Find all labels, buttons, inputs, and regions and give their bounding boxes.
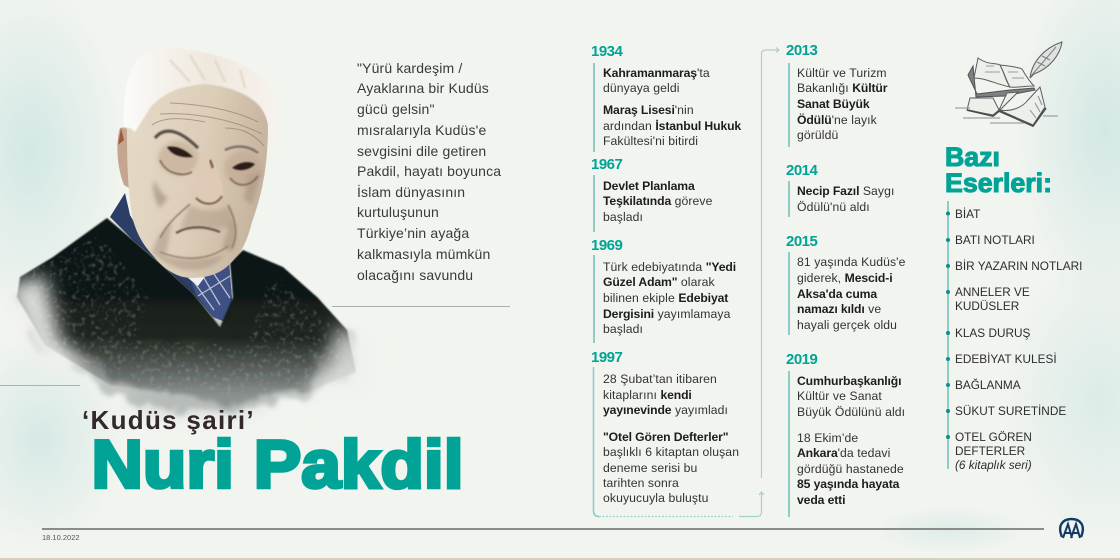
- entry 1967: Devlet Planlama: [603, 179, 695, 193]
- entry 1934: Fakültesi'ni bitirdi: [603, 134, 698, 148]
- shirt: [110, 193, 232, 323]
- entry 1934: Maraş Lisesi'nin: [603, 103, 694, 117]
- smoke fade: edges: [5, 275, 372, 412]
- entry 2019: [788, 371, 905, 517]
- year 2013: 2013: [786, 42, 817, 59]
- sweater wear: [25, 235, 350, 395]
- entry 2015: namazı kıldı ve: [797, 302, 881, 316]
- entry 2014: Necip Fazıl Saygı: [797, 184, 894, 198]
- decorative rule: teal left: [0, 385, 80, 386]
- text: DEFTERLER: [955, 444, 1025, 458]
- date: 18.10.2022: [42, 533, 80, 542]
- text: BİR YAZARIN NOTLARI: [955, 259, 1082, 273]
- eye sockets: [158, 141, 198, 175]
- year 1967: 1967: [591, 156, 622, 173]
- timeline column 2: [786, 42, 905, 517]
- eyebrows: [155, 131, 198, 148]
- text: EDEBİYAT KULESİ: [955, 352, 1057, 366]
- eyes: [167, 147, 193, 157]
- entry 2013: görüldü: [797, 128, 838, 142]
- entry 1934: Kahramanmaraş'ta: [603, 66, 710, 80]
- entry 2015: giderek, Mescid-i: [797, 271, 892, 285]
- text: SÜKUT SURETİNDE: [955, 404, 1066, 418]
- entry 2013: Ödülü'ne layık: [797, 113, 877, 127]
- heading: works: Bazı: [945, 142, 1000, 172]
- entry 2013: [788, 63, 888, 147]
- year 1969: 1969: [591, 237, 622, 254]
- entry 1997: okuyucuyla buluştu: [603, 491, 708, 505]
- quote text: sevgisini dile getiren: [357, 143, 486, 159]
- entry 2019: 85 yaşında hayata: [797, 477, 899, 491]
- quote text: Türkiye’nin ayağa: [357, 225, 469, 241]
- entry 1997: tarihten sonra: [603, 476, 679, 490]
- text: OTEL GÖREN: [955, 430, 1032, 444]
- entry 1997: [603, 372, 739, 505]
- quote text: olacağını savundu: [357, 267, 473, 283]
- quote text: kurtuluşunun: [357, 204, 439, 220]
- quote text: Pakdil, hayatı boyunca: [357, 163, 501, 179]
- year 1934: 1934: [591, 43, 622, 60]
- works list text: [955, 207, 1082, 472]
- entry 1997: başlıklı 6 kitaptan oluşan: [603, 445, 739, 459]
- entry 1997: kitaplarını kendi: [603, 388, 692, 402]
- quote text: kalkmasıyla mümkün: [357, 246, 490, 262]
- entry 2015: [788, 252, 905, 335]
- entry 1969: Güzel Adam" olarak: [603, 275, 715, 289]
- text: (6 kitaplık seri): [955, 458, 1032, 472]
- entry 1967: [593, 175, 712, 232]
- text: ANNELER VE: [955, 285, 1030, 299]
- entry 1934: [593, 63, 742, 152]
- entry 1934: dünyaya geldi: [603, 81, 680, 95]
- entry 1967: başladı: [603, 210, 643, 224]
- entry 2019: veda etti: [797, 493, 845, 507]
- list dots: [946, 212, 950, 439]
- subtitle: ‘Kudüs şairi’: [82, 405, 255, 435]
- entry 2013: Bakanlığı Kültür: [797, 81, 887, 95]
- face: [127, 78, 268, 278]
- entry 2019: Ankara'da tedavi: [797, 446, 890, 460]
- text: KUDÜSLER: [955, 299, 1019, 313]
- entry 2015: 81 yaşında Kudüs'e: [797, 255, 905, 269]
- mouth and folds: [176, 227, 220, 233]
- quote text: [357, 60, 502, 283]
- decorative rule: quote: [332, 306, 510, 307]
- text: KLAS DURUŞ: [955, 326, 1030, 340]
- entry 1969: Türk edebiyatında "Yedi: [603, 260, 736, 274]
- entry 2019: Kültür ve Sanat: [797, 389, 882, 403]
- nose: [189, 152, 223, 205]
- entry 2019: gördüğü hastanede: [797, 462, 904, 476]
- text: BATI NOTLARI: [955, 233, 1035, 247]
- heading: works: Eserleri:: [945, 168, 1052, 198]
- entry 2019: Büyük Ödülünü aldı: [797, 405, 905, 419]
- entry 2013: Kültür ve Turizm: [797, 66, 887, 80]
- text: BAĞLANMA: [955, 378, 1021, 392]
- entry 2014: Ödülü'nü aldı: [797, 200, 870, 214]
- bottom edge strip: [0, 558, 1120, 560]
- quote text: İslam dünyasının: [357, 184, 465, 200]
- hair: [124, 48, 279, 146]
- quote text: mısralarıyla Kudüs'e: [357, 122, 486, 138]
- list axis: [947, 201, 949, 469]
- timeline column 1: [591, 43, 742, 505]
- entry 2013: Sanat Büyük: [797, 97, 870, 111]
- year 1997: 1997: [591, 349, 622, 366]
- entry 2019: 18 Ekim’de: [797, 431, 858, 445]
- quote text: "Yürü kardeşim /: [357, 60, 462, 76]
- entry 1997: deneme serisi bu: [603, 461, 697, 475]
- entry 1934: ardından İstanbul Hukuk: [603, 119, 741, 133]
- entry 2014: [788, 181, 894, 217]
- year 2015: 2015: [786, 233, 817, 250]
- entry 1997: yayınevinde yayımladı: [603, 403, 728, 417]
- entry 2015: Aksa'da cuma: [797, 287, 877, 301]
- entry 1997: 28 Şubat’tan itibaren: [603, 372, 717, 386]
- works list: [946, 201, 950, 469]
- footer rule: [42, 528, 1044, 530]
- sweater: [17, 218, 356, 398]
- entry 1969: bilinen ekiple Edebiyat: [603, 291, 728, 305]
- quote text: gücü gelsin": [357, 101, 435, 117]
- main title: Nuri Pakdil: [92, 426, 464, 502]
- entry 1997: "Otel Gören Defterler": [603, 430, 728, 444]
- entry 1969: başladı: [603, 322, 643, 336]
- quote text: Ayaklarına bir Kudüs: [357, 80, 489, 96]
- year 2014: 2014: [786, 162, 817, 179]
- forehead wrinkles: [152, 103, 264, 146]
- ear: [117, 126, 130, 188]
- face shadows: [150, 170, 262, 271]
- entry 1969: Dergisini yayımlamaya: [603, 307, 730, 321]
- smoke haze: [15, 262, 362, 416]
- year 2019: 2019: [786, 351, 817, 368]
- entry 1967: Teşkilatında göreve: [603, 194, 712, 208]
- entry 2019: Cumhurbaşkanlığı: [797, 374, 901, 388]
- text: BİAT: [955, 207, 980, 221]
- entry 2015: hayali gerçek oldu: [797, 318, 897, 332]
- entry 1969: [593, 255, 736, 343]
